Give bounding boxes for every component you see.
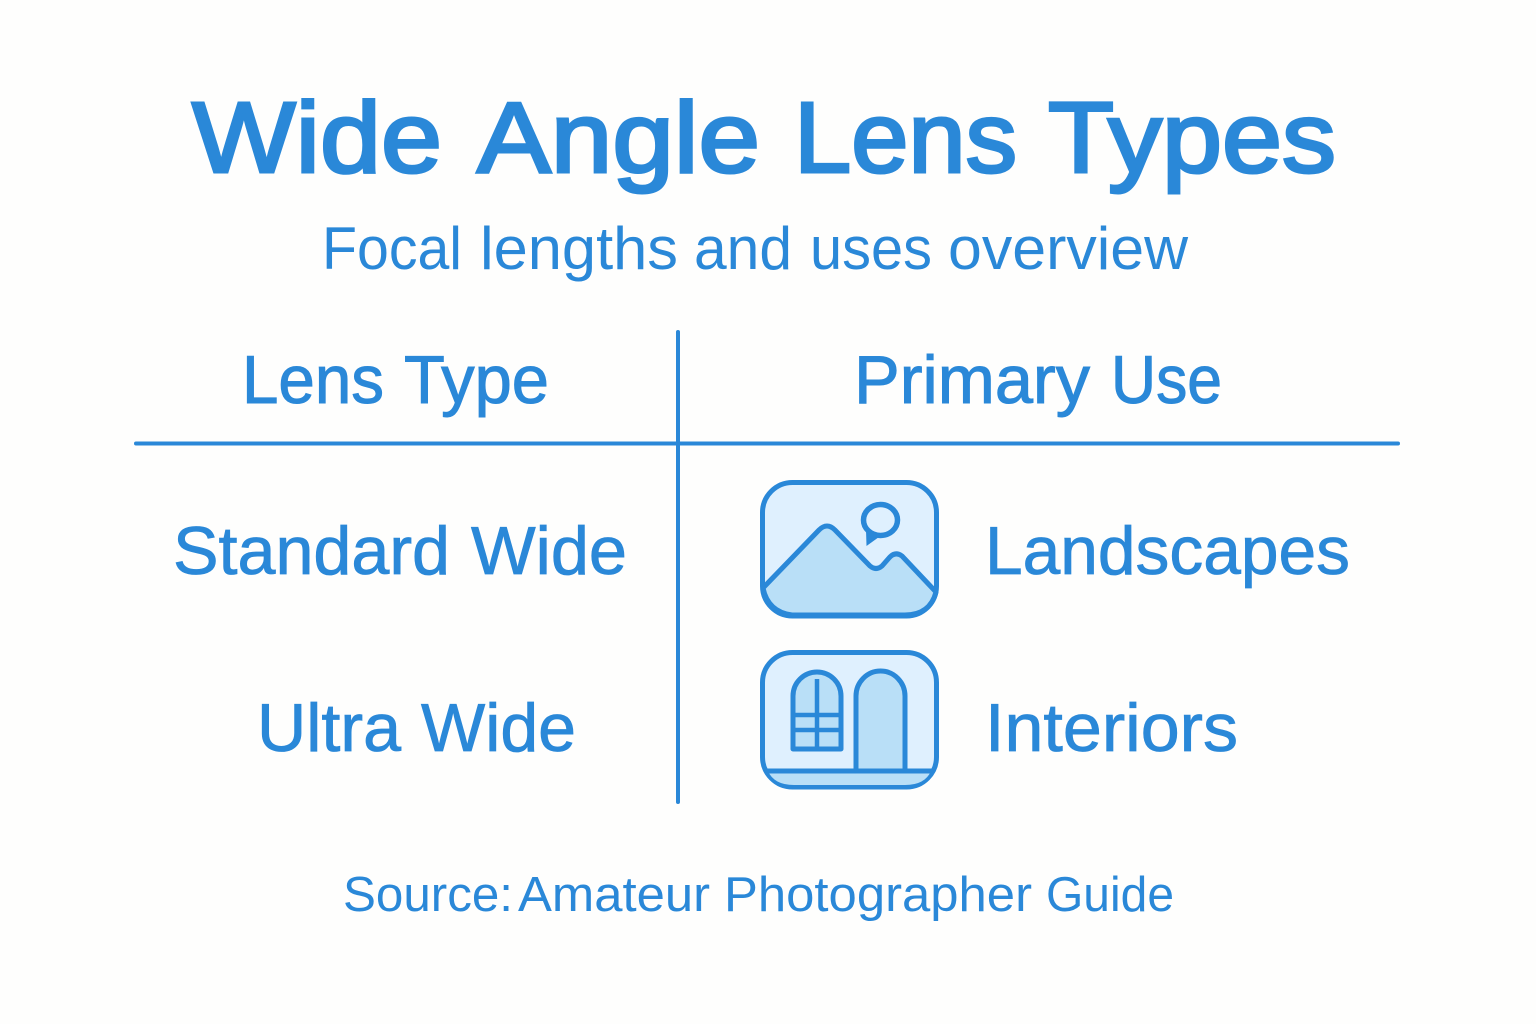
column heading: primary use: Use bbox=[1111, 342, 1222, 418]
subtitle: Focal bbox=[322, 215, 462, 282]
row label: interiors: Interiors bbox=[985, 690, 1238, 766]
title: Wide bbox=[192, 82, 442, 194]
subtitle: overview bbox=[948, 215, 1189, 282]
subtitle: uses bbox=[810, 215, 932, 282]
row label: landscapes: Landscapes bbox=[985, 513, 1350, 589]
source note: Amateur bbox=[518, 868, 710, 922]
title: Types bbox=[1048, 82, 1336, 194]
source note bbox=[343, 868, 1174, 922]
title: Lens bbox=[794, 82, 1017, 194]
title bbox=[192, 82, 1336, 194]
subtitle bbox=[322, 215, 1189, 282]
row label: ultra wide: Wide bbox=[421, 690, 576, 766]
source note: Photographer bbox=[724, 868, 1032, 922]
row label: standard wide: Wide bbox=[471, 513, 627, 589]
horizontal divider bbox=[136, 442, 1398, 446]
row label: standard wide bbox=[173, 513, 627, 589]
column heading: primary use bbox=[854, 342, 1222, 418]
source note: Guide bbox=[1046, 868, 1174, 922]
title: Angle bbox=[477, 82, 760, 194]
vertical divider bbox=[676, 332, 680, 802]
subtitle: lengths bbox=[480, 215, 678, 282]
subtitle: and bbox=[694, 215, 792, 282]
icon: interior bbox=[762, 652, 936, 787]
column heading: lens type: Lens bbox=[242, 342, 384, 418]
icon: landscape bbox=[762, 482, 936, 616]
column heading: lens type: Type bbox=[404, 342, 549, 418]
row label: ultra wide bbox=[257, 690, 576, 766]
column heading: primary use: Primary bbox=[854, 342, 1090, 418]
row label: ultra wide: Ultra bbox=[257, 690, 401, 766]
source note: Source: bbox=[343, 868, 513, 922]
row label: standard wide: Standard bbox=[173, 513, 450, 589]
table bbox=[136, 332, 1398, 802]
column heading: lens type bbox=[242, 342, 549, 418]
